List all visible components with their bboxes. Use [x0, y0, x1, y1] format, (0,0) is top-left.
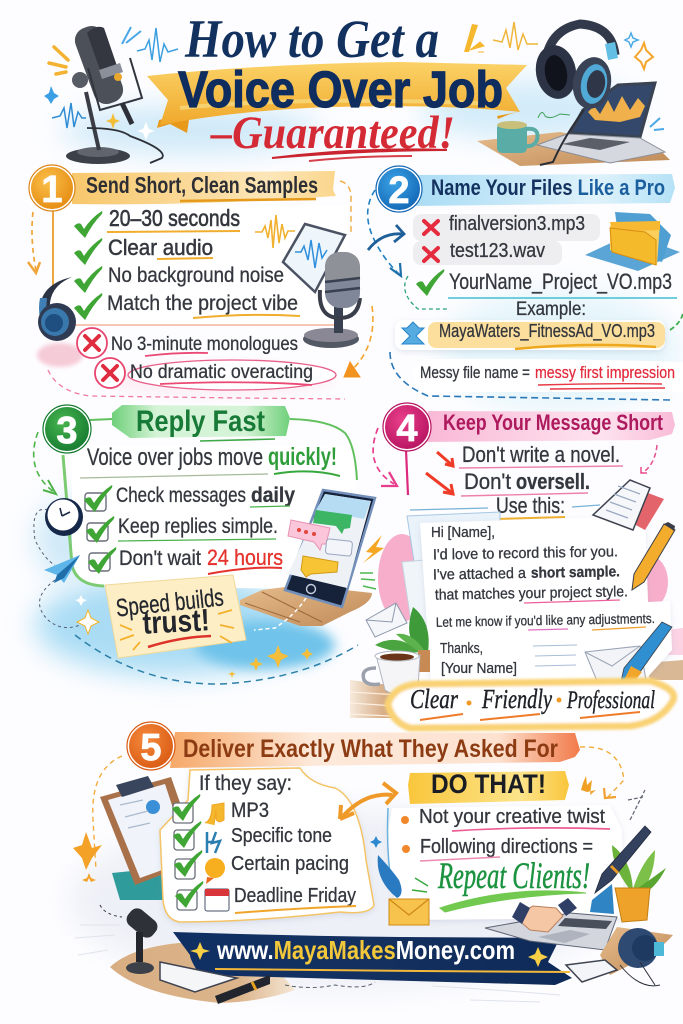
if they say checklist card: If they say:	[199, 772, 292, 795]
section 2 heading: Name Your Files Like a Pro	[431, 175, 665, 200]
navy website banner: www.MayaMakesMoney.com	[216, 935, 515, 965]
section 5 heading	[170, 732, 580, 768]
icon: tablet with waveform	[283, 224, 345, 292]
pink accent blobs	[378, 534, 683, 655]
number badge 4: 4	[396, 408, 418, 450]
short advice lines	[459, 442, 623, 496]
don't list: monologues and overacting: No dramatic overacting	[130, 362, 313, 383]
email template text: Hi [Name],	[431, 524, 495, 541]
do that card: Repeat Clients!	[437, 856, 590, 897]
icon: notepad with red folder	[593, 480, 664, 530]
email template text: Let me know if you'd like any adjustments.	[436, 611, 655, 630]
section 1 white panel	[53, 205, 348, 325]
example file name pill	[395, 320, 665, 350]
messy file name callout: Messy file name =	[420, 363, 530, 382]
number badge 2	[376, 166, 422, 212]
section 4 connectors	[373, 428, 657, 495]
checklist of good samples: Clear audio	[108, 235, 213, 260]
email template text: I've attached a	[433, 565, 527, 584]
section 5 heading: Deliver Exactly What They Asked For	[183, 735, 558, 763]
icon: large fountain pen	[595, 826, 651, 893]
number badge 5	[127, 722, 175, 770]
messy file name callout	[412, 359, 683, 392]
header title banner ribbon	[147, 62, 527, 133]
do that card: Not your creative twist	[419, 806, 605, 828]
clear, friendly, professional brush callout: Clear	[410, 684, 458, 714]
header illustration: desk, coffee mug and laptop	[477, 83, 670, 166]
speed builds trust sticky note: Speed builds	[115, 583, 225, 623]
decorative sparkles left	[73, 832, 382, 882]
blue device behind plant	[590, 884, 614, 914]
light motion lines	[75, 905, 560, 1002]
section 3 connector lines	[34, 419, 358, 684]
bad file names: finalversion3.mp3	[449, 213, 585, 235]
short advice lines: Don't write a novel.	[462, 442, 620, 467]
use this label	[410, 493, 600, 519]
accent lightning and lines	[360, 535, 384, 589]
icon: envelope	[389, 899, 429, 925]
email template text: I'd love to record this for you.	[433, 543, 618, 564]
check box list	[84, 484, 295, 574]
icon: folder	[585, 212, 680, 271]
check box list: Don't wait	[119, 547, 201, 570]
accent marks near do that	[581, 776, 645, 820]
if they say checklist card: Deadline Friday	[234, 885, 356, 907]
section 3: reply fast	[34, 405, 384, 684]
number badge 4	[383, 403, 431, 451]
section 1 heading: Send Short, Clean Samples	[86, 172, 318, 198]
subheading: voice over jobs move quickly	[80, 443, 340, 478]
speed builds trust sticky note: trust!	[142, 602, 210, 641]
section 1: send short, clean samples	[28, 165, 360, 399]
email template text: Thanks,	[440, 640, 483, 657]
icon: paper plane	[44, 555, 80, 583]
left wooden table	[110, 943, 295, 1003]
example label: Example:	[516, 299, 586, 320]
number badge 2: 2	[388, 170, 410, 212]
dashed footer line	[48, 370, 345, 399]
check box list: Check messages	[116, 484, 246, 507]
do that card: Following directions =	[420, 836, 593, 858]
short advice lines: Don't	[464, 469, 511, 494]
use this label: Use this:	[496, 493, 565, 518]
if they say checklist card: Specific tone	[231, 825, 332, 847]
back paper sheets	[402, 512, 500, 628]
clipboard	[100, 776, 200, 900]
desk planks	[350, 660, 683, 718]
number badge 1: 1	[41, 169, 63, 211]
email template text: [Your Name]	[441, 660, 517, 677]
number badge 5: 5	[140, 727, 162, 769]
don't list: monologues and overacting: No 3-minute monologues	[111, 334, 298, 355]
check box list: daily	[251, 484, 295, 507]
number badge 3: 3	[56, 410, 78, 452]
section 2 connector arrows	[344, 190, 683, 400]
email template text: that matches your project style.	[435, 583, 628, 604]
header title	[178, 9, 503, 161]
bad file names: test123.wav	[450, 240, 545, 262]
header title: Voice Over Job	[178, 61, 503, 118]
icon: clock	[45, 498, 83, 536]
section 3 white panel	[72, 445, 357, 590]
navy website banner	[173, 932, 572, 985]
icon: envelope in letter	[585, 646, 646, 681]
right desk, headphones and notepad	[566, 927, 673, 986]
clear, friendly, professional brush callout: Friendly	[481, 684, 552, 714]
checklist of good samples: 20–30 seconds	[109, 205, 240, 231]
if they say checklist card	[160, 768, 374, 922]
laptop with handshake	[485, 898, 617, 950]
icon: blue pen	[620, 622, 672, 686]
speed builds trust sticky note	[105, 575, 246, 658]
icon: blue leaf plant	[378, 855, 402, 898]
bad file names	[413, 213, 600, 265]
section 5: deliver exactly what they asked for	[73, 722, 673, 1004]
email template letter	[420, 516, 672, 684]
email template text	[431, 524, 655, 677]
header decorations left: sound waves and sparkles	[44, 27, 178, 140]
icon: coffee cup	[363, 651, 420, 695]
icon: yellow pen	[632, 522, 675, 590]
subheading: voice over jobs move quickly: Voice over jobs move	[87, 444, 263, 471]
check box list: 24 hours	[207, 545, 283, 570]
mic, notebook and pen on left table	[123, 905, 270, 1004]
do that label: DO THAT!	[431, 769, 546, 799]
number badge 3	[43, 405, 91, 453]
header illustration: headphones	[532, 24, 618, 112]
section 2: name your files like a pro	[344, 166, 683, 400]
icon: smartphone with chat bubbles	[285, 490, 375, 607]
header illustration: studio microphone	[66, 22, 163, 164]
icon: golden sound wave	[255, 215, 295, 248]
if they say checklist card: Certain pacing	[231, 853, 349, 875]
icon: potted plant	[612, 845, 666, 922]
short advice lines: oversell.	[516, 469, 590, 494]
icon: envelope on left	[366, 603, 407, 637]
checklist of good samples: Match the project vibe	[107, 292, 298, 315]
clear, friendly, professional brush callout	[388, 681, 674, 728]
icon: potted plant	[375, 607, 430, 672]
section 5 connectors	[93, 747, 624, 870]
if they say checklist card: MP3	[231, 799, 269, 822]
gold sparkles	[75, 595, 313, 678]
section 4: keep your message short	[350, 403, 683, 728]
double arrow	[340, 783, 396, 819]
do that card	[388, 805, 624, 920]
header title: –Guaranteed!	[210, 107, 455, 159]
header title: How to Get a	[184, 9, 439, 69]
section 3 heading: Reply Fast	[136, 405, 265, 438]
icon: desk microphone	[303, 252, 360, 348]
section 1 heading	[72, 171, 336, 204]
icon: headphones	[37, 277, 83, 367]
email template text: short sample.	[531, 563, 620, 582]
number badge 1	[29, 165, 75, 211]
header decorations right: waves and sparkles	[464, 22, 664, 130]
checklist of good samples: No background noise	[108, 264, 284, 287]
do that label	[408, 769, 569, 804]
checklist of good samples	[74, 205, 300, 320]
section 1 connector lines	[28, 181, 351, 325]
wooden stand	[240, 585, 372, 630]
check box list: Keep replies simple.	[118, 515, 278, 538]
don't list: monologues and overacting	[77, 328, 336, 398]
subheading: voice over jobs move quickly: quickly!	[268, 443, 337, 471]
